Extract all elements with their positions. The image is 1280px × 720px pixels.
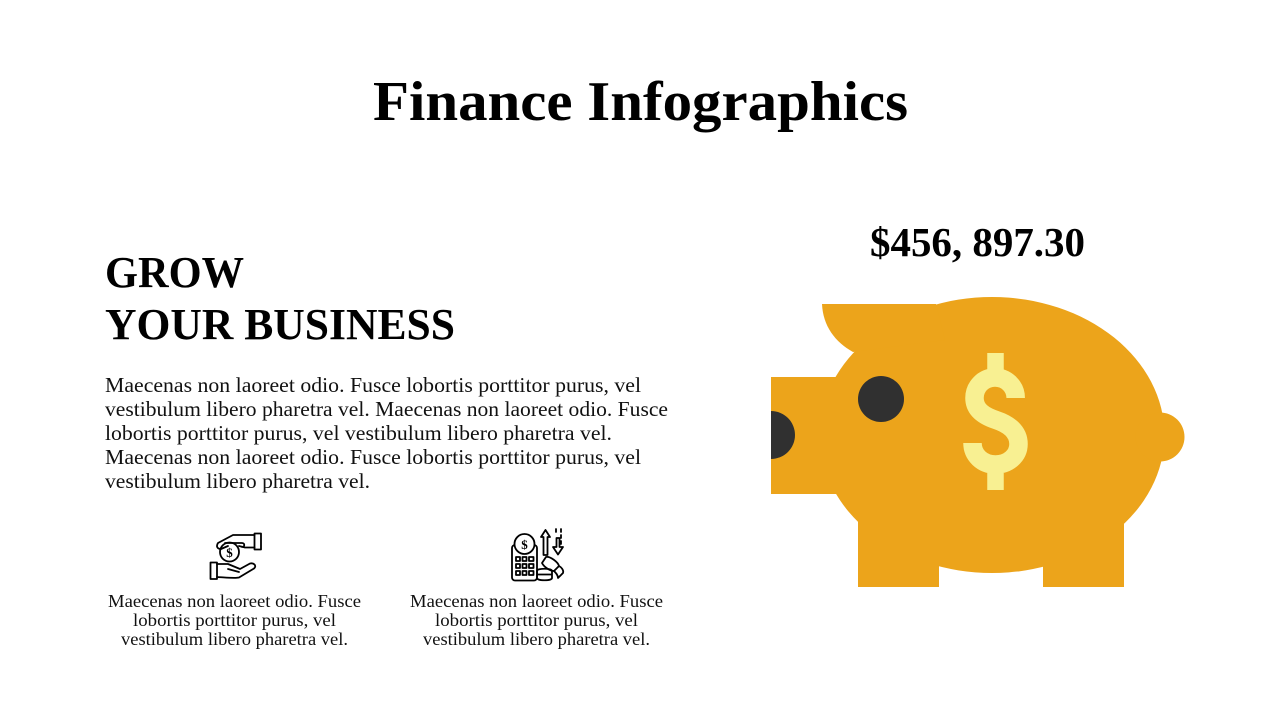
body paragraph: lobortis porttitor purus, vel vestibulum libero pharetra vel. [105, 421, 612, 445]
caption: left icon: Maecenas non laoreet odio. Fusce [108, 591, 361, 611]
icon glyph: dollar in calculator coin: $ [521, 537, 528, 552]
caption: right icon: lobortis porttitor purus, vel [435, 610, 638, 630]
body paragraph [105, 373, 668, 493]
caption: left icon: vestibulum libero pharetra vel. [121, 629, 348, 649]
body paragraph: vestibulum libero pharetra vel. Maecenas non laoreet odio. Fusce [105, 397, 668, 421]
pig ear [822, 304, 945, 352]
title: Finance Infographics [373, 71, 908, 133]
icon glyph: dollar in coin: $ [226, 545, 233, 560]
body paragraph: Maecenas non laoreet odio. Fusce lobortis porttitor purus, vel [105, 445, 641, 469]
pig front leg [858, 510, 939, 587]
dollar sign [972, 353, 1018, 490]
caption: right icon: Maecenas non laoreet odio. Fusce [410, 591, 663, 611]
caption: right icon: vestibulum libero pharetra vel. [423, 629, 650, 649]
pig back leg [1043, 510, 1124, 587]
heading: grow your business: YOUR BUSINESS [105, 300, 455, 349]
pig tail [1136, 412, 1184, 462]
pig nostril [771, 411, 795, 459]
icon: calculator, arrows and coins [512, 529, 563, 580]
pig snout [771, 377, 851, 494]
pig eye [858, 376, 904, 422]
pig body [820, 297, 1164, 573]
piggy bank illustration [771, 297, 1184, 587]
icon: hands exchanging coin [210, 534, 261, 579]
heading: grow your business [105, 248, 455, 349]
heading: grow your business: GROW [105, 248, 244, 297]
body paragraph: Maecenas non laoreet odio. Fusce lobortis porttitor purus, vel [105, 373, 641, 397]
caption: left icon: lobortis porttitor purus, vel [133, 610, 336, 630]
caption: left icon [108, 591, 361, 649]
caption: right icon [410, 591, 663, 649]
amount label: $456, 897.30 [870, 219, 1085, 265]
body paragraph: vestibulum libero pharetra vel. [105, 469, 370, 493]
